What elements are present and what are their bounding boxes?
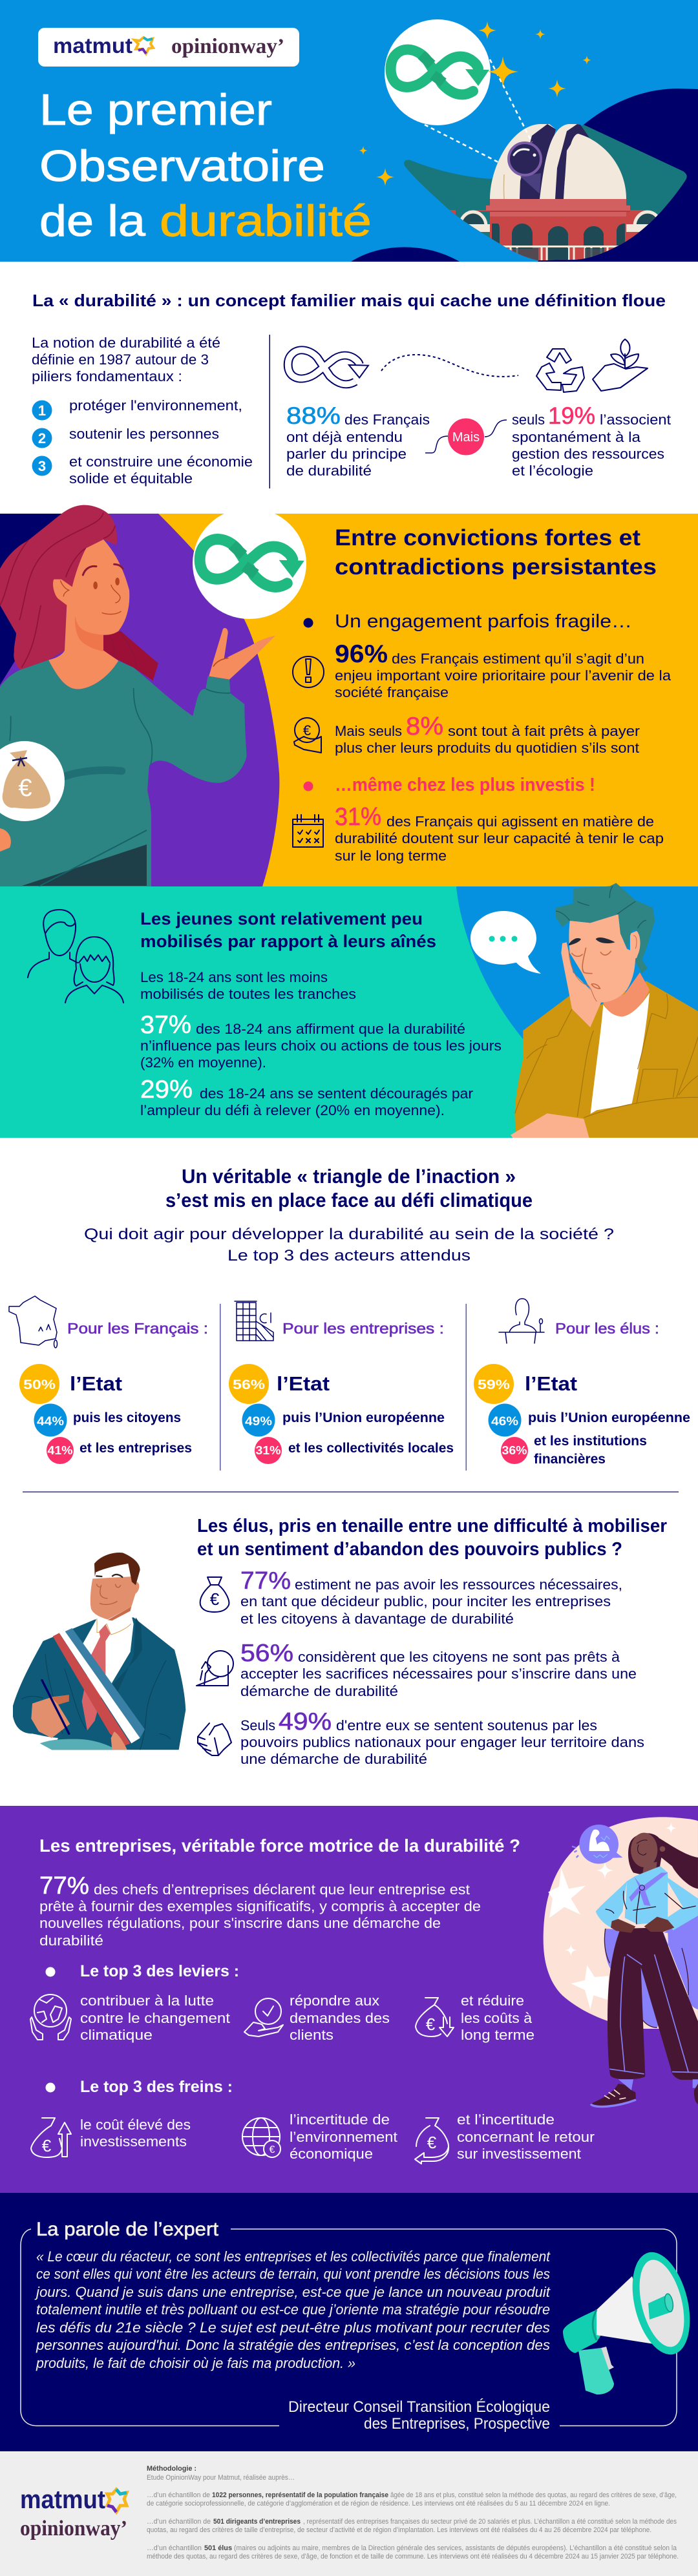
stat 37 xyxy=(140,1011,502,1071)
purple blob xyxy=(0,514,279,886)
icon: megaphone xyxy=(563,2246,698,2394)
attribution: des Entreprises, Prospective xyxy=(364,2415,550,2433)
icon: recycle xyxy=(536,349,584,392)
lever 2: répondre aux xyxy=(290,1993,379,2009)
subheading investis: …même chez les plus investis ! xyxy=(335,775,595,795)
intro text: Les 18-24 ans sont les moins xyxy=(140,969,328,985)
heading: contradictions persistantes xyxy=(335,554,657,580)
stat 19: et l’écologie xyxy=(512,463,593,479)
heading xyxy=(335,525,657,580)
column: élus: 59% xyxy=(478,1377,510,1392)
brake 3: et l’incertitude xyxy=(457,2111,555,2128)
bullet navy xyxy=(304,618,313,628)
stat 96: 96% xyxy=(335,640,388,668)
quote: personnes aujourd'hui. Donc la stratégie des entreprises, c’est la conception des xyxy=(36,2337,550,2353)
methodology text: …d’un échantillon de xyxy=(147,2491,210,2499)
brake 1: investissements xyxy=(80,2133,187,2150)
stars xyxy=(359,21,591,186)
column: entreprises: l’Etat xyxy=(277,1372,330,1395)
stat 49 elus xyxy=(240,1708,644,1767)
column: élus: 36% xyxy=(502,1444,527,1457)
icon: young people xyxy=(28,910,123,1003)
stat 77 elus: estiment ne pas avoir les ressources nécessaires, xyxy=(295,1576,622,1593)
pillar list: 1 xyxy=(38,403,46,419)
quote: les défis du 21e siècle ? Le sujet est peut-être plus motivant pour recruter des xyxy=(36,2319,550,2336)
icon: bag with down arrow: € xyxy=(426,2015,436,2034)
section: entreprises xyxy=(0,1806,698,2193)
stat 96: enjeu important voire prioritaire pour l’avenir de la xyxy=(335,667,672,684)
stat 19: l’associent xyxy=(600,412,671,428)
column: Français: l’Etat xyxy=(70,1372,122,1395)
title: Le premier xyxy=(39,85,272,134)
stat 19: gestion des ressources xyxy=(512,446,664,462)
stat 77 entreprises: nouvelles régulations, pour s'inscrire dans une démarche de xyxy=(39,1915,441,1931)
title xyxy=(39,85,372,246)
quote: produits, le fait de choisir où je fais ma production. » xyxy=(36,2355,355,2371)
section: convictions xyxy=(0,504,698,886)
quote: totalement inutile et très polluant ou est-ce que j’oriente ma stratégie pour résoudre xyxy=(36,2301,550,2318)
icon: globe with euro xyxy=(242,2118,280,2157)
stat 49 elus: pouvoirs publics nationaux pour engager leur territoire dans xyxy=(240,1734,644,1750)
lever 3: les coûts à xyxy=(461,2010,533,2026)
dome xyxy=(490,124,626,199)
section: jeunes xyxy=(0,883,698,1138)
stat 77 entreprises: des chefs d’entreprises déclarent que leur entreprise est xyxy=(94,1881,470,1898)
icon: euro in hand xyxy=(294,718,321,753)
stat 8 xyxy=(335,713,640,756)
stat 31: sur le long terme xyxy=(335,848,447,864)
brake 2: économique xyxy=(290,2146,373,2162)
speech bubble xyxy=(471,911,541,974)
subheading fragile: Un engagement parfois fragile… xyxy=(335,611,632,632)
pillar list: et construire une économie xyxy=(69,454,253,470)
lower sweater and trousers xyxy=(0,821,151,886)
stat 37: 37% xyxy=(140,1011,191,1039)
intro text xyxy=(140,969,356,1002)
stat 56 elus: démarche de durabilité xyxy=(240,1683,398,1699)
icon: calendar xyxy=(293,815,323,847)
section: triangle de l'inaction xyxy=(9,1165,690,1492)
lever 3: long terme xyxy=(461,2027,534,2043)
brake 3: sur investissement xyxy=(457,2146,581,2162)
logo: opinionway: opinionway’ xyxy=(20,2517,127,2540)
subheading freins: Le top 3 des freins : xyxy=(80,2078,233,2096)
column: Français: 41% xyxy=(48,1444,72,1457)
quote: jours. Quand je suis dans une entreprise, est-ce que je lance un nouveau produit xyxy=(34,2284,551,2300)
stat 19: spontanément à la xyxy=(512,429,641,445)
dotted sight lines xyxy=(425,59,532,163)
heading: mobilisés par rapport à leurs aînés xyxy=(140,932,436,951)
heading xyxy=(197,1516,667,1560)
heading: La parole de l’expert xyxy=(36,2219,219,2240)
stat 77 entreprises xyxy=(39,1872,481,1949)
stat 31 xyxy=(335,803,664,864)
stat 56 elus: considèrent que les citoyens ne sont pas prêts à xyxy=(298,1649,620,1665)
stat 77 entreprises: durabilité xyxy=(39,1932,103,1949)
lever 1: climatique xyxy=(80,2027,153,2043)
icon: hand with plant xyxy=(593,339,648,391)
lever 2: demandes des xyxy=(290,2010,390,2026)
navy blob xyxy=(538,89,698,262)
Mais badge: Mais xyxy=(452,430,480,445)
column: Français: et les entreprises xyxy=(79,1441,192,1456)
icon: exclamation xyxy=(293,656,324,687)
lever 1: contre le changement xyxy=(80,2010,230,2026)
stat 88: 88% xyxy=(286,403,341,429)
methodology text: 501 dirigeants d’entreprises xyxy=(213,2518,301,2526)
stat 8: 8% xyxy=(406,713,443,740)
illustration: confident woman xyxy=(544,1817,698,2107)
stat 96: des Français estiment qu’il s’agit d’un xyxy=(392,651,644,667)
section: élus xyxy=(13,1516,667,1767)
icon: handshake xyxy=(198,1723,231,1755)
icon: euro in hand: € xyxy=(303,722,311,738)
heading: La « durabilité » : un concept familier mais qui cache une définition floue xyxy=(32,291,666,310)
lever 3: et réduire xyxy=(461,1993,524,2009)
stat 88 xyxy=(286,403,430,479)
icon: globe in hands xyxy=(30,1995,71,2040)
stat 49 elus: 49% xyxy=(279,1708,332,1735)
Mais badge xyxy=(425,419,507,455)
column: Français: 44% xyxy=(37,1415,64,1429)
column: entreprises: 49% xyxy=(245,1415,272,1429)
stat 29: des 18-24 ans se sentent découragés par xyxy=(200,1085,473,1102)
stat 88: ont déjà entendu xyxy=(286,429,403,445)
brake 2: l’environnement xyxy=(290,2129,397,2145)
stat 96 xyxy=(335,640,672,700)
brake 1: le coût élevé des xyxy=(80,2117,191,2133)
lens circle with infinity xyxy=(385,19,491,125)
methodology text: 501 élus xyxy=(204,2544,232,2552)
column: Français: puis les citoyens xyxy=(73,1410,181,1425)
column: élus xyxy=(474,1299,690,1467)
title: durabilité xyxy=(160,196,372,246)
observatory building xyxy=(446,199,666,262)
heading: Un véritable « triangle de l’inaction » xyxy=(182,1165,516,1188)
column: élus: puis l’Union européenne xyxy=(528,1410,690,1425)
column: entreprises: puis l’Union européenne xyxy=(282,1410,445,1425)
brake 2: l’incertitude de xyxy=(290,2111,390,2128)
stat 77 elus xyxy=(240,1567,622,1627)
illustration: tired man xyxy=(511,883,698,1138)
stat 77 entreprises: 77% xyxy=(39,1872,89,1900)
column: élus: financières xyxy=(534,1452,606,1467)
logo: matmut: matmut xyxy=(20,2486,105,2514)
subheading: Le top 3 des acteurs attendus xyxy=(227,1247,471,1264)
methodology text: Etude OpinionWay pour Matmut, réalisée auprès… xyxy=(147,2474,295,2482)
stat 8: sont tout à fait prêts à payer xyxy=(448,723,640,739)
icon: money bag circle xyxy=(0,741,65,821)
pillar list xyxy=(32,397,253,487)
stat 8: Mais seuls xyxy=(335,723,402,739)
heading: Les élus, pris en tenaille entre une difficulté à mobiliser xyxy=(197,1516,667,1536)
illustration: mayor xyxy=(13,1553,185,1750)
column: entreprises: et les collectivités locales xyxy=(288,1441,454,1456)
brake 2 xyxy=(242,2111,397,2162)
stat 31: durabilité doutent sur leur capacité à tenir le cap xyxy=(335,830,664,846)
pillar list: 3 xyxy=(38,458,46,474)
column: entreprises: Pour les entreprises : xyxy=(282,1320,444,1337)
quote xyxy=(34,2248,551,2371)
icon: check in hand xyxy=(244,1998,283,2037)
stat 88: de durabilité xyxy=(286,463,372,479)
dotted connector xyxy=(381,355,518,377)
quote: « Le cœur du réacteur, ce sont les entreprises et les collectivités parce que finalement xyxy=(36,2248,551,2265)
hero panel xyxy=(0,0,698,262)
section: parole de l'expert xyxy=(0,2193,698,2451)
lever 1: contribuer à la lutte xyxy=(80,1993,214,2009)
stat 56 elus: 56% xyxy=(240,1640,293,1667)
lever 2 xyxy=(244,1993,390,2043)
heading: Les entreprises, véritable force motrice de la durabilité ? xyxy=(39,1836,520,1856)
heading xyxy=(140,909,436,951)
pillar list: 2 xyxy=(38,430,46,446)
stat 49 elus: d'entre eux se sentent soutenus par les xyxy=(336,1717,597,1733)
icon: globe with euro: € xyxy=(270,2144,275,2155)
icon: money bag: € xyxy=(210,1589,220,1609)
circle with infinity xyxy=(193,508,306,619)
column: élus: Pour les élus : xyxy=(555,1320,659,1337)
heading: Les jeunes sont relativement peu xyxy=(140,909,423,928)
title: Observatoire xyxy=(39,141,325,191)
stat 77 elus: et les citoyens à davantage de durabilité xyxy=(240,1611,514,1627)
stat 19 xyxy=(512,403,671,479)
stat 56 elus: accepter les sacrifices nécessaires pour s’inscrire dans une xyxy=(240,1666,637,1682)
attribution: Directeur Conseil Transition Écologique xyxy=(288,2398,550,2416)
heading: Entre convictions fortes et xyxy=(335,525,640,550)
stat 29 xyxy=(140,1076,473,1118)
stat 77 elus: en tant que décideur public, pour inciter les entreprises xyxy=(240,1593,611,1609)
column: élus: l’Etat xyxy=(525,1372,577,1395)
icon: bag with return arrow: € xyxy=(427,2133,437,2152)
stat 37: n’influence pas leurs choix ou actions de tous les jours xyxy=(140,1038,502,1054)
subheading leviers: Le top 3 des leviers : xyxy=(80,1962,239,1980)
subheading: Qui doit agir pour développer la durabilité au sein de la société ? xyxy=(84,1226,614,1243)
heading xyxy=(165,1165,533,1211)
title: de la xyxy=(39,196,145,246)
methodology text: …d’un échantillon de xyxy=(147,2518,211,2526)
intro paragraph xyxy=(32,335,220,384)
attribution xyxy=(288,2398,550,2433)
footer panel xyxy=(0,2451,698,2576)
pillar list: soutenir les personnes xyxy=(69,426,219,442)
column: Français: Pour les Français : xyxy=(67,1320,208,1337)
methodology text: quotas, au regard des critères de taille d’entreprise, de secteur d’activité et de région d’implantation. Les interviews ont été réalisées du 4 au 26 décembre 2024 par téléphone. xyxy=(147,2526,651,2534)
brake 1 xyxy=(31,2117,191,2157)
brake 3 xyxy=(415,2111,595,2164)
icon: money bag xyxy=(200,1577,229,1612)
methodology text: …d’un échantillon xyxy=(147,2544,202,2552)
stat 31: 31% xyxy=(335,803,381,831)
intro paragraph: définie en 1987 autour de 3 xyxy=(32,351,209,368)
column: entreprises: 56% xyxy=(233,1377,265,1392)
methodology text: 1022 personnes, représentatif de la population française xyxy=(212,2491,388,2499)
quote: ce sont elles qui vont être les acteurs de terrain, qui vont prendre les décisions tous les xyxy=(36,2266,550,2282)
intro paragraph: piliers fondamentaux : xyxy=(32,368,182,384)
logo card: matmut xyxy=(53,34,132,58)
methodology text: Méthodologie : xyxy=(147,2465,196,2473)
stat 88: parler du principe xyxy=(286,446,407,462)
logo card: opinionway’ xyxy=(171,35,284,58)
heading: s’est mis en place face au défi climatique xyxy=(165,1189,533,1211)
methodology text: (maires ou adjoints au maire, membres de la Direction générale des services, assistants de députés européens). L’échantillon a été constitué selon la xyxy=(234,2544,677,2552)
frame xyxy=(21,2229,677,2425)
icon: buildings xyxy=(235,1301,273,1341)
stat 37: (32% en moyenne). xyxy=(140,1054,266,1071)
stat 29: l’ampleur du défi à relever (20% en moyenne). xyxy=(140,1102,445,1118)
methodology text: de catégorie socioprofessionnelle, de catégorie d’agglomération et de région de résidence. Les interviews ont été réalisées du 5 au 11 décembre 2024 en ligne. xyxy=(147,2500,610,2508)
subheading xyxy=(84,1226,614,1264)
logo card xyxy=(38,28,299,67)
intro paragraph: La notion de durabilité a été xyxy=(32,335,220,351)
pillar list: solide et équitable xyxy=(69,470,193,487)
brake 3: concernant le retour xyxy=(457,2129,595,2145)
icon: France map xyxy=(9,1296,57,1348)
heading: et un sentiment d’abandon des pouvoirs publics ? xyxy=(197,1539,622,1560)
stat 96: société française xyxy=(335,684,449,700)
stat 49 elus: une démarche de durabilité xyxy=(240,1751,427,1767)
stat 77 elus: 77% xyxy=(240,1567,291,1595)
icon: money bag circle: € xyxy=(18,775,32,802)
lever 2: clients xyxy=(290,2027,333,2043)
stat 56 elus xyxy=(240,1640,637,1699)
stat 19: seuls xyxy=(512,412,545,428)
icon: bag with up arrow: € xyxy=(42,2136,52,2155)
column: entreprises xyxy=(229,1301,454,1464)
icon: speaker at podium xyxy=(499,1299,544,1343)
column: élus: 46% xyxy=(491,1415,518,1429)
illustration: woman xyxy=(0,505,275,827)
stat 19: 19% xyxy=(548,403,595,429)
stat 49 elus: Seuls xyxy=(240,1717,275,1733)
icon: outline infinity xyxy=(288,350,368,384)
icon: bag with up arrow xyxy=(31,2118,71,2157)
intro text: mobilisés de toutes les tranches xyxy=(140,986,356,1002)
column: Français xyxy=(9,1296,208,1464)
navy mound xyxy=(351,247,460,262)
stat 29: 29% xyxy=(140,1076,193,1104)
methodology text xyxy=(147,2465,679,2560)
icon: person pushing boulder xyxy=(196,1651,233,1686)
stat 88: des Français xyxy=(344,412,430,428)
column: Français: 50% xyxy=(23,1377,56,1392)
stat 31: des Français qui agissent en matière de xyxy=(386,813,654,830)
lever 1 xyxy=(30,1993,230,2043)
column: élus: et les institutions xyxy=(534,1434,647,1449)
pillar list: protéger l'environnement, xyxy=(69,397,242,414)
lever 3 xyxy=(416,1993,534,2043)
icon: bag with down arrow xyxy=(416,1998,454,2037)
icon: bag with return arrow xyxy=(415,2118,449,2164)
teal leaf xyxy=(404,125,687,260)
column: entreprises: 31% xyxy=(256,1444,280,1457)
bullet pink xyxy=(304,782,313,791)
section: définition xyxy=(32,291,671,488)
stat 77 entreprises: prête à fournir des exemples significatifs, y compris à accepter de xyxy=(39,1898,481,1914)
stat 8: plus cher leurs produits du quotidien s’ils sont xyxy=(335,740,639,756)
stat 37: des 18-24 ans affirment que la durabilité xyxy=(196,1021,465,1037)
